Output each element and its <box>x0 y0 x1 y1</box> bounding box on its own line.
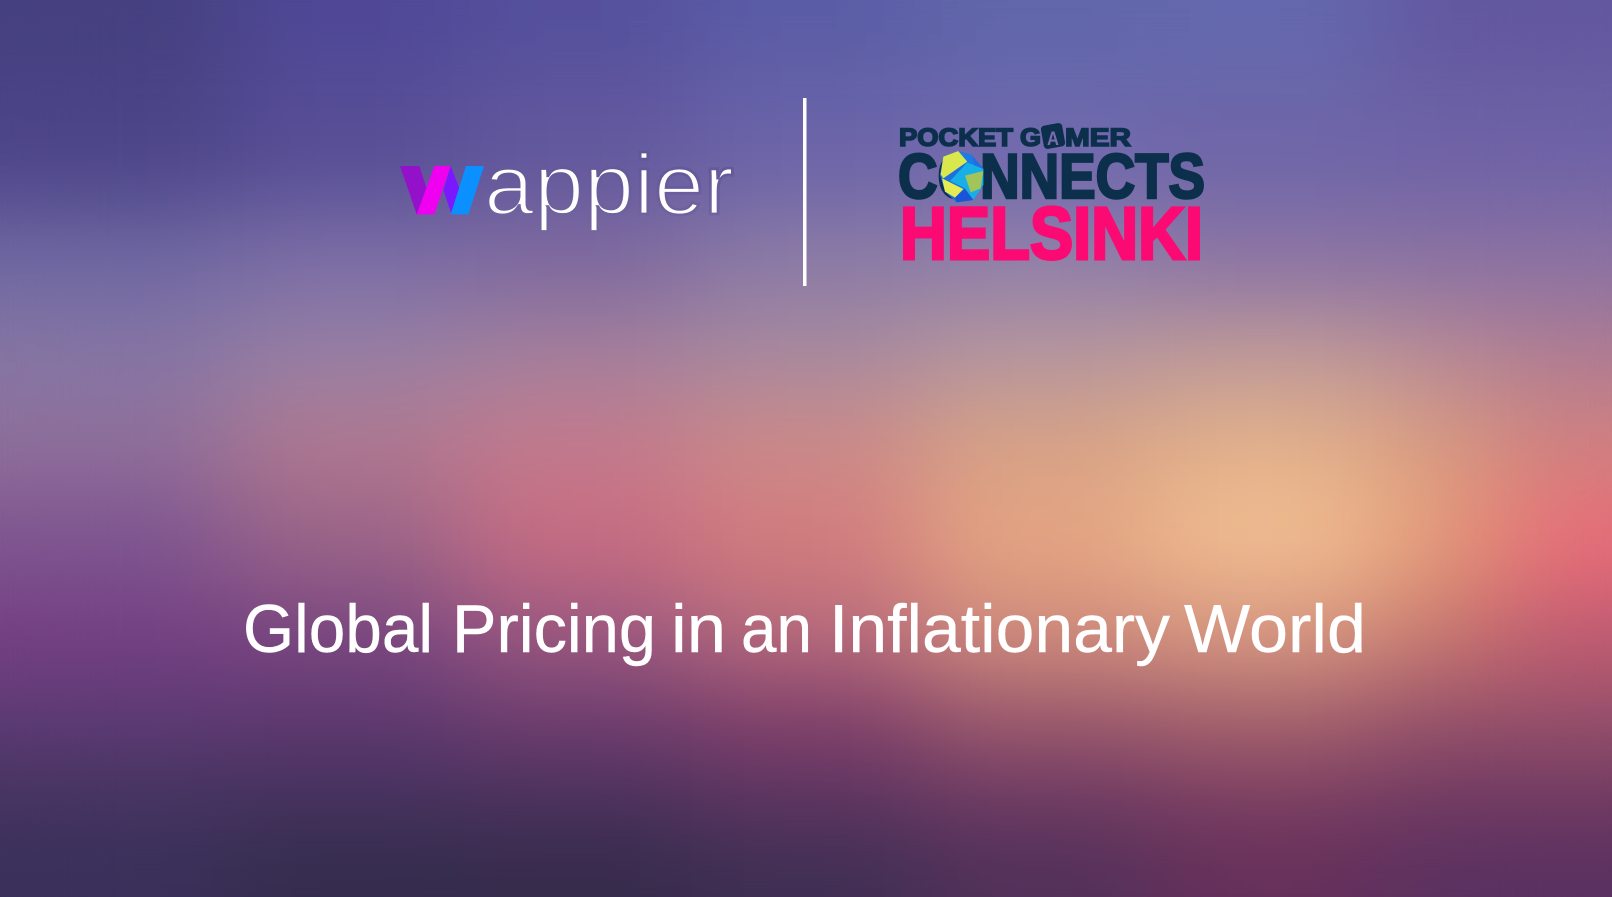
divider between logos <box>803 98 806 286</box>
title: World <box>1184 591 1366 667</box>
wordmark: Connects: CONNECTS <box>898 142 1205 212</box>
wordmark: appier: appier <box>484 138 734 233</box>
title: Inflationary <box>829 591 1170 667</box>
icon: wappier W mark <box>400 166 484 214</box>
title: Pricing <box>452 591 656 667</box>
title: Global <box>243 591 433 667</box>
title <box>243 591 1366 667</box>
logo: wappier <box>400 138 734 233</box>
wordmark: Pocket Gamer <box>899 123 1131 152</box>
title: an <box>741 591 812 667</box>
wordmark: Pocket Gamer: A <box>1047 129 1059 150</box>
wordmark: Pocket Gamer: MER <box>1065 124 1131 152</box>
icon: low-poly globe <box>940 151 983 202</box>
wordmark: Helsinki: HELSINKI <box>900 192 1203 275</box>
wordmark: Pocket Gamer: POCKET <box>899 124 1013 152</box>
title: in <box>671 591 726 667</box>
logo: Pocket Gamer Connects Helsinki <box>898 123 1205 275</box>
wordmark: Pocket Gamer: G <box>1020 124 1041 152</box>
